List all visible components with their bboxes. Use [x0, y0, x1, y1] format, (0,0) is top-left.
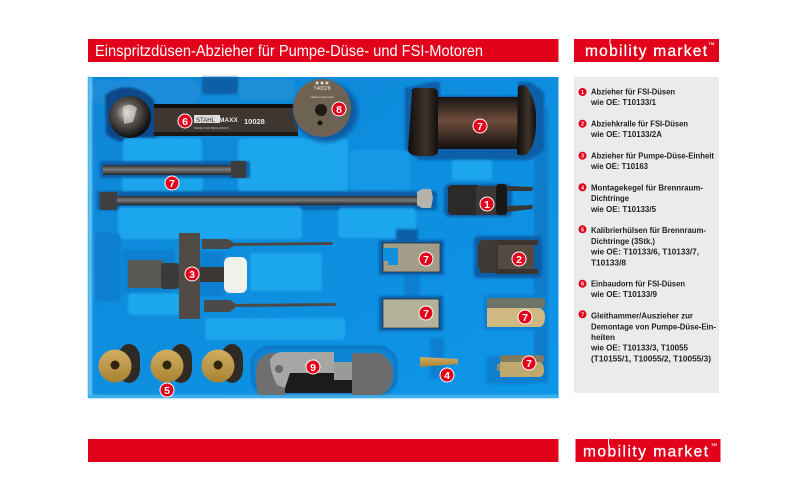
tool: flat plate [383, 299, 439, 328]
tool: claw socket [478, 240, 538, 274]
number markers on photo: 5 [164, 385, 170, 397]
legend item 2: Abziehkralle für FSI-Düsen [591, 118, 688, 128]
legend item 5: Dichtringe (3Stk.) [591, 236, 655, 246]
legend item 7: wie OE: T10133/3, T10055 [590, 343, 688, 353]
tool: three brass calibration sleeves [98, 344, 243, 383]
number markers on photo: 7 [423, 254, 429, 266]
legend item 1: Abzieher für FSI-Düsen [591, 86, 675, 96]
tool: nozzle puller bracket [128, 233, 336, 319]
tool: short threaded rod [103, 161, 246, 178]
number markers on photo: 2 [516, 254, 522, 266]
legend item 6: wie OE: T10133/9 [590, 289, 657, 299]
logo: mobility market footer [576, 439, 720, 462]
number markers on photo [160, 102, 536, 397]
tool: ball-end slide hammer shaft: MAXX [219, 117, 238, 124]
legend item 7: Gleithammer/Auszieher zur [591, 311, 694, 321]
legend item 5: Kalibrierhülsen für Brennraum- [591, 225, 706, 235]
legend item 3: Abzieher für Pumpe-Düse-Einheit [591, 150, 714, 160]
number markers on photo: 7 [522, 312, 528, 324]
legend item 1 [578, 86, 675, 107]
legend item 1: wie OE: T10133/1 [590, 97, 656, 107]
number markers on photo: 1 [484, 199, 490, 211]
tool: slotted plate [383, 243, 440, 272]
legend item 4: Montagekegel für Brennraum- [591, 182, 703, 192]
tool: small hex bushing [497, 355, 544, 377]
legend item 2: wie OE: T10133/2A [590, 129, 662, 139]
logo: mobility market footer: TM [711, 442, 717, 447]
legend item 4: Dichtringe [591, 193, 629, 203]
product photo: tool case [88, 77, 558, 398]
legend item 4 [578, 182, 703, 214]
legend item 2: 2 [581, 122, 584, 128]
number markers on photo: 3 [189, 269, 195, 281]
tool: disc T40028 [293, 79, 358, 142]
tool: disc T40028: made in Germany [310, 95, 334, 99]
tool: long rod with nut [100, 189, 433, 210]
legend item 5: wie OE: T10133/6, T10133/7, [590, 247, 699, 257]
number markers on photo: 7 [423, 308, 429, 320]
tool: slide hammer weight cylinder [408, 85, 536, 156]
legend item 7: heiten [591, 332, 615, 342]
tool: ball-end slide hammer shaft: STAHL [196, 118, 216, 124]
title bar [88, 39, 558, 62]
title bar: Einspritzdüsen-Abzieher für Pumpe-Düse- und FSI-Motoren [95, 43, 483, 60]
legend item 7 [578, 310, 716, 364]
legend item 3: wie OE: T10163 [590, 161, 648, 171]
legend item 5: 5 [581, 227, 584, 233]
logo: mobility market header: mobility market [585, 43, 708, 60]
footer bar [88, 439, 558, 462]
legend item 4: 4 [581, 185, 585, 191]
panel: parts legend [574, 77, 719, 393]
legend item 3: 3 [581, 154, 584, 160]
foam tray relief [88, 77, 558, 398]
tool: large hex bushing [487, 298, 545, 327]
number markers on photo: 7 [526, 358, 532, 370]
legend item 6 [578, 278, 685, 299]
tool: ball-end slide hammer shaft: 10028 [244, 117, 265, 126]
logo: mobility market header [574, 39, 719, 62]
tool: lever in grey foam [256, 352, 393, 395]
number markers on photo: 9 [310, 362, 316, 374]
legend item 3 [578, 150, 714, 171]
tool: brass cone [420, 357, 458, 367]
number markers on photo: 6 [182, 116, 188, 128]
tool: ball-end slide hammer shaft [109, 96, 298, 138]
legend item 7: (T10155/1, T10055/2, T10055/3) [591, 354, 711, 364]
legend item 6: Einbaudorn für FSI-Düsen [591, 278, 685, 288]
legend item 2 [578, 118, 688, 139]
number markers on photo: 8 [336, 104, 342, 116]
number markers on photo: 7 [169, 178, 175, 190]
tool: disc T40028: ▣ ▣ ▣ [315, 80, 329, 85]
legend item 1: 1 [581, 90, 584, 96]
number markers on photo: 4 [444, 370, 450, 382]
legend item 5: T10133/8 [591, 258, 626, 268]
legend item 7: 7 [581, 312, 584, 318]
tool: disc T40028: T40028 [314, 86, 331, 92]
logo: mobility market footer: mobility market [583, 444, 709, 460]
number markers on photo: 7 [477, 121, 483, 133]
tool: FSI nozzle puller [448, 184, 533, 215]
legend item 7: Demontage von Pumpe-Düse-Ein- [591, 322, 716, 332]
logo: mobility market header: TM [708, 41, 715, 46]
legend item 5 [578, 225, 706, 268]
tool: ball-end slide hammer shaft: MADE FOR MECHANICS [194, 126, 229, 130]
legend item 4: wie OE: T10133/5 [590, 204, 656, 214]
legend item 6: 6 [581, 282, 584, 288]
